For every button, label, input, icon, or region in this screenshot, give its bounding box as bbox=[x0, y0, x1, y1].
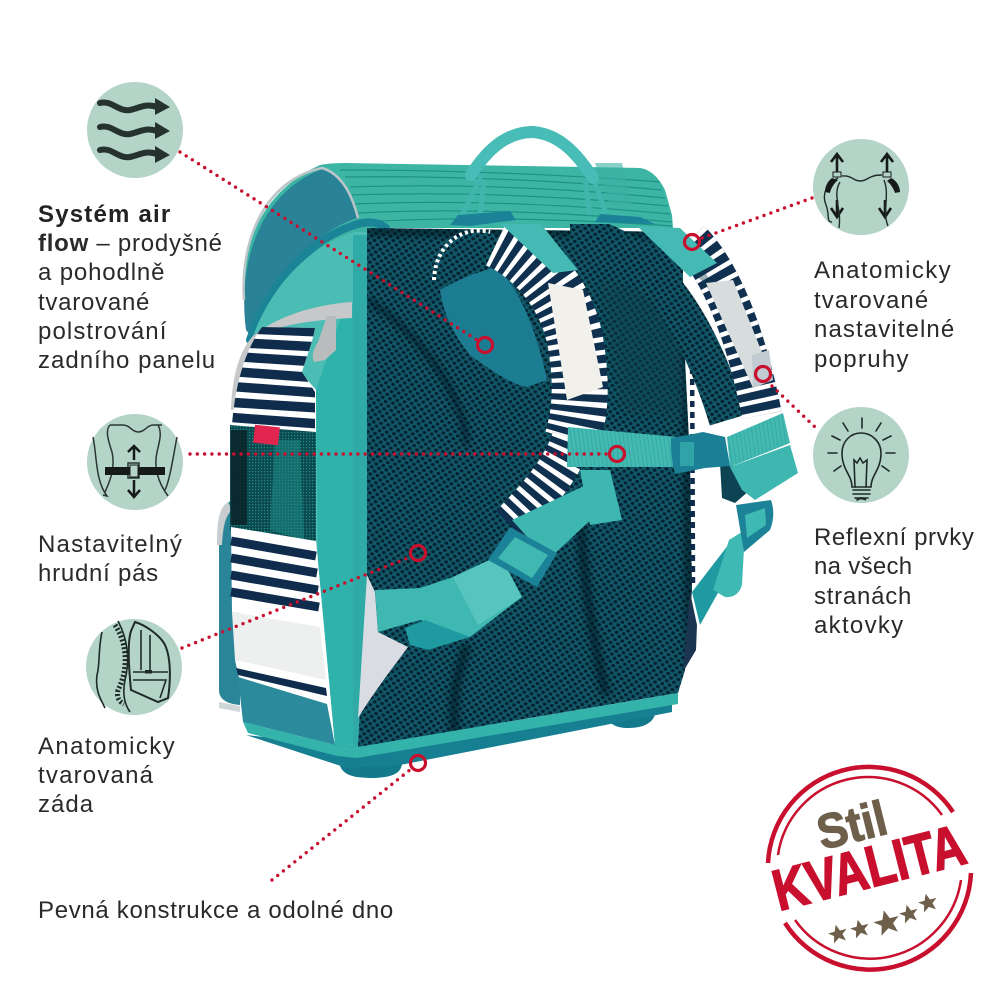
text: anatomical back bbox=[38, 733, 176, 818]
zip pull bbox=[313, 316, 336, 362]
grey lining bbox=[358, 575, 408, 718]
chest buckle bbox=[671, 432, 730, 474]
callout rings bbox=[410, 234, 770, 770]
right shoulder strap bbox=[570, 226, 773, 503]
side base panel bbox=[238, 677, 335, 745]
side panel bbox=[253, 232, 367, 747]
icon: anatomical back bbox=[86, 619, 182, 715]
text: adjustable straps bbox=[814, 257, 955, 373]
icon: adjustable straps bbox=[813, 139, 909, 235]
red label bbox=[253, 425, 280, 445]
icon: chest strap bbox=[87, 414, 183, 510]
lower pocket stripes bbox=[231, 527, 327, 704]
heading: air flow text: Systém air bbox=[38, 201, 171, 228]
heading: air flow text: tvarované bbox=[38, 289, 150, 316]
lid bbox=[244, 163, 673, 340]
heading: air flow text bbox=[38, 201, 223, 374]
right lower strap bbox=[692, 500, 773, 625]
text: adjustable straps: tvarované bbox=[814, 287, 929, 314]
backpack illustration bbox=[217, 132, 798, 778]
base trim bbox=[243, 693, 678, 758]
text: adjustable straps: Anatomicky bbox=[814, 257, 952, 284]
grey zip trim bbox=[231, 302, 352, 410]
handle bbox=[450, 132, 655, 226]
chest strap bbox=[567, 413, 798, 525]
top flap bbox=[244, 168, 386, 340]
logo plate bbox=[440, 267, 547, 387]
text: chest strap: hrudní pás bbox=[38, 560, 159, 587]
icon: light bulb bbox=[813, 407, 909, 503]
small rear panel bbox=[217, 500, 240, 712]
text: anatomical back: záda bbox=[38, 791, 94, 818]
text: reflective elements: Reflexní prvky bbox=[814, 524, 974, 551]
heading: air flow text: zadního panelu bbox=[38, 347, 216, 374]
icon: air flow arrows bbox=[87, 82, 183, 178]
text: anatomical back: tvarovaná bbox=[38, 762, 154, 789]
text: adjustable straps: nastavitelné bbox=[814, 316, 955, 343]
text: reflective elements bbox=[814, 524, 974, 639]
text: anatomical back: Anatomicky bbox=[38, 733, 176, 760]
left shoulder strap bbox=[430, 223, 603, 525]
text: reflective elements: na všech bbox=[814, 553, 912, 580]
text: adjustable straps: popruhy bbox=[814, 346, 910, 373]
stamp: quality bbox=[766, 767, 972, 970]
heading: air flow text: polstrování bbox=[38, 318, 168, 345]
feet bbox=[340, 708, 656, 778]
heading: air flow text: flow – prodyšné bbox=[38, 230, 223, 257]
text: reflective elements: aktovky bbox=[814, 612, 904, 639]
mesh back panel bbox=[358, 228, 692, 747]
text: sturdy base: Pevná konstrukce a odolné dno bbox=[38, 897, 394, 924]
heading: air flow text: a pohodlně bbox=[38, 259, 165, 286]
base underside bbox=[246, 700, 672, 768]
dark strap edge bbox=[683, 592, 697, 672]
text: reflective elements: stranách bbox=[814, 583, 912, 610]
right stripe edge bbox=[692, 335, 693, 585]
mesh pocket bbox=[230, 425, 316, 545]
text: chest strap: Nastavitelný bbox=[38, 531, 183, 558]
left lower strap bbox=[375, 475, 615, 650]
callout lines bbox=[180, 152, 815, 880]
stamp: quality: Stil bbox=[812, 791, 893, 861]
upper pocket stripes bbox=[232, 327, 315, 428]
text: chest strap bbox=[38, 531, 183, 587]
